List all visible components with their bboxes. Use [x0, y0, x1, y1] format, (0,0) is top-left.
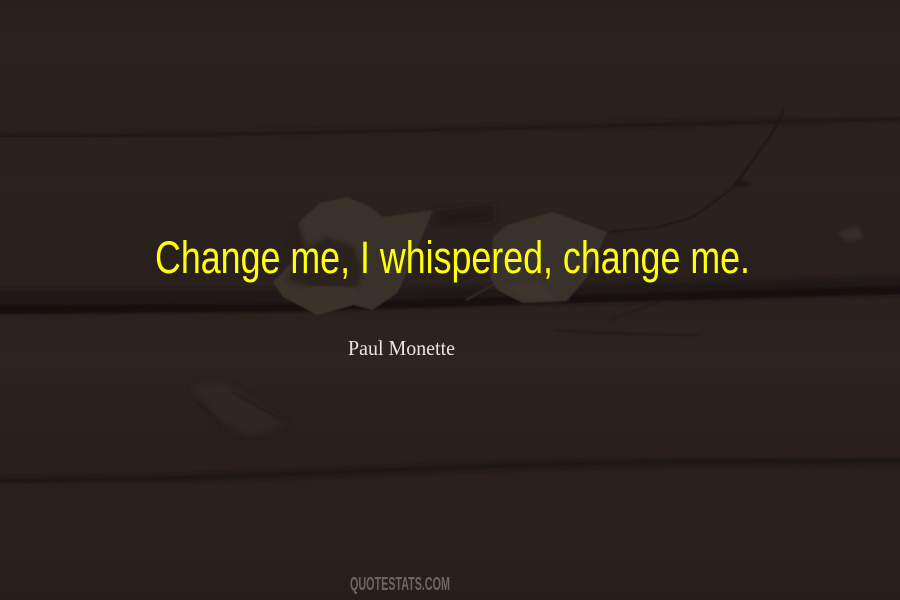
- quote text: Change me, I whispered, change me.: [155, 232, 750, 283]
- plank gap: [0, 276, 900, 314]
- source watermark: QUOTESTATS.COM: [350, 574, 450, 594]
- grain lines: [0, 118, 900, 481]
- wood knot: [192, 382, 286, 436]
- left leaf: [273, 197, 433, 315]
- right leaf and twig: [466, 110, 784, 303]
- author name: Paul Monette: [348, 336, 455, 360]
